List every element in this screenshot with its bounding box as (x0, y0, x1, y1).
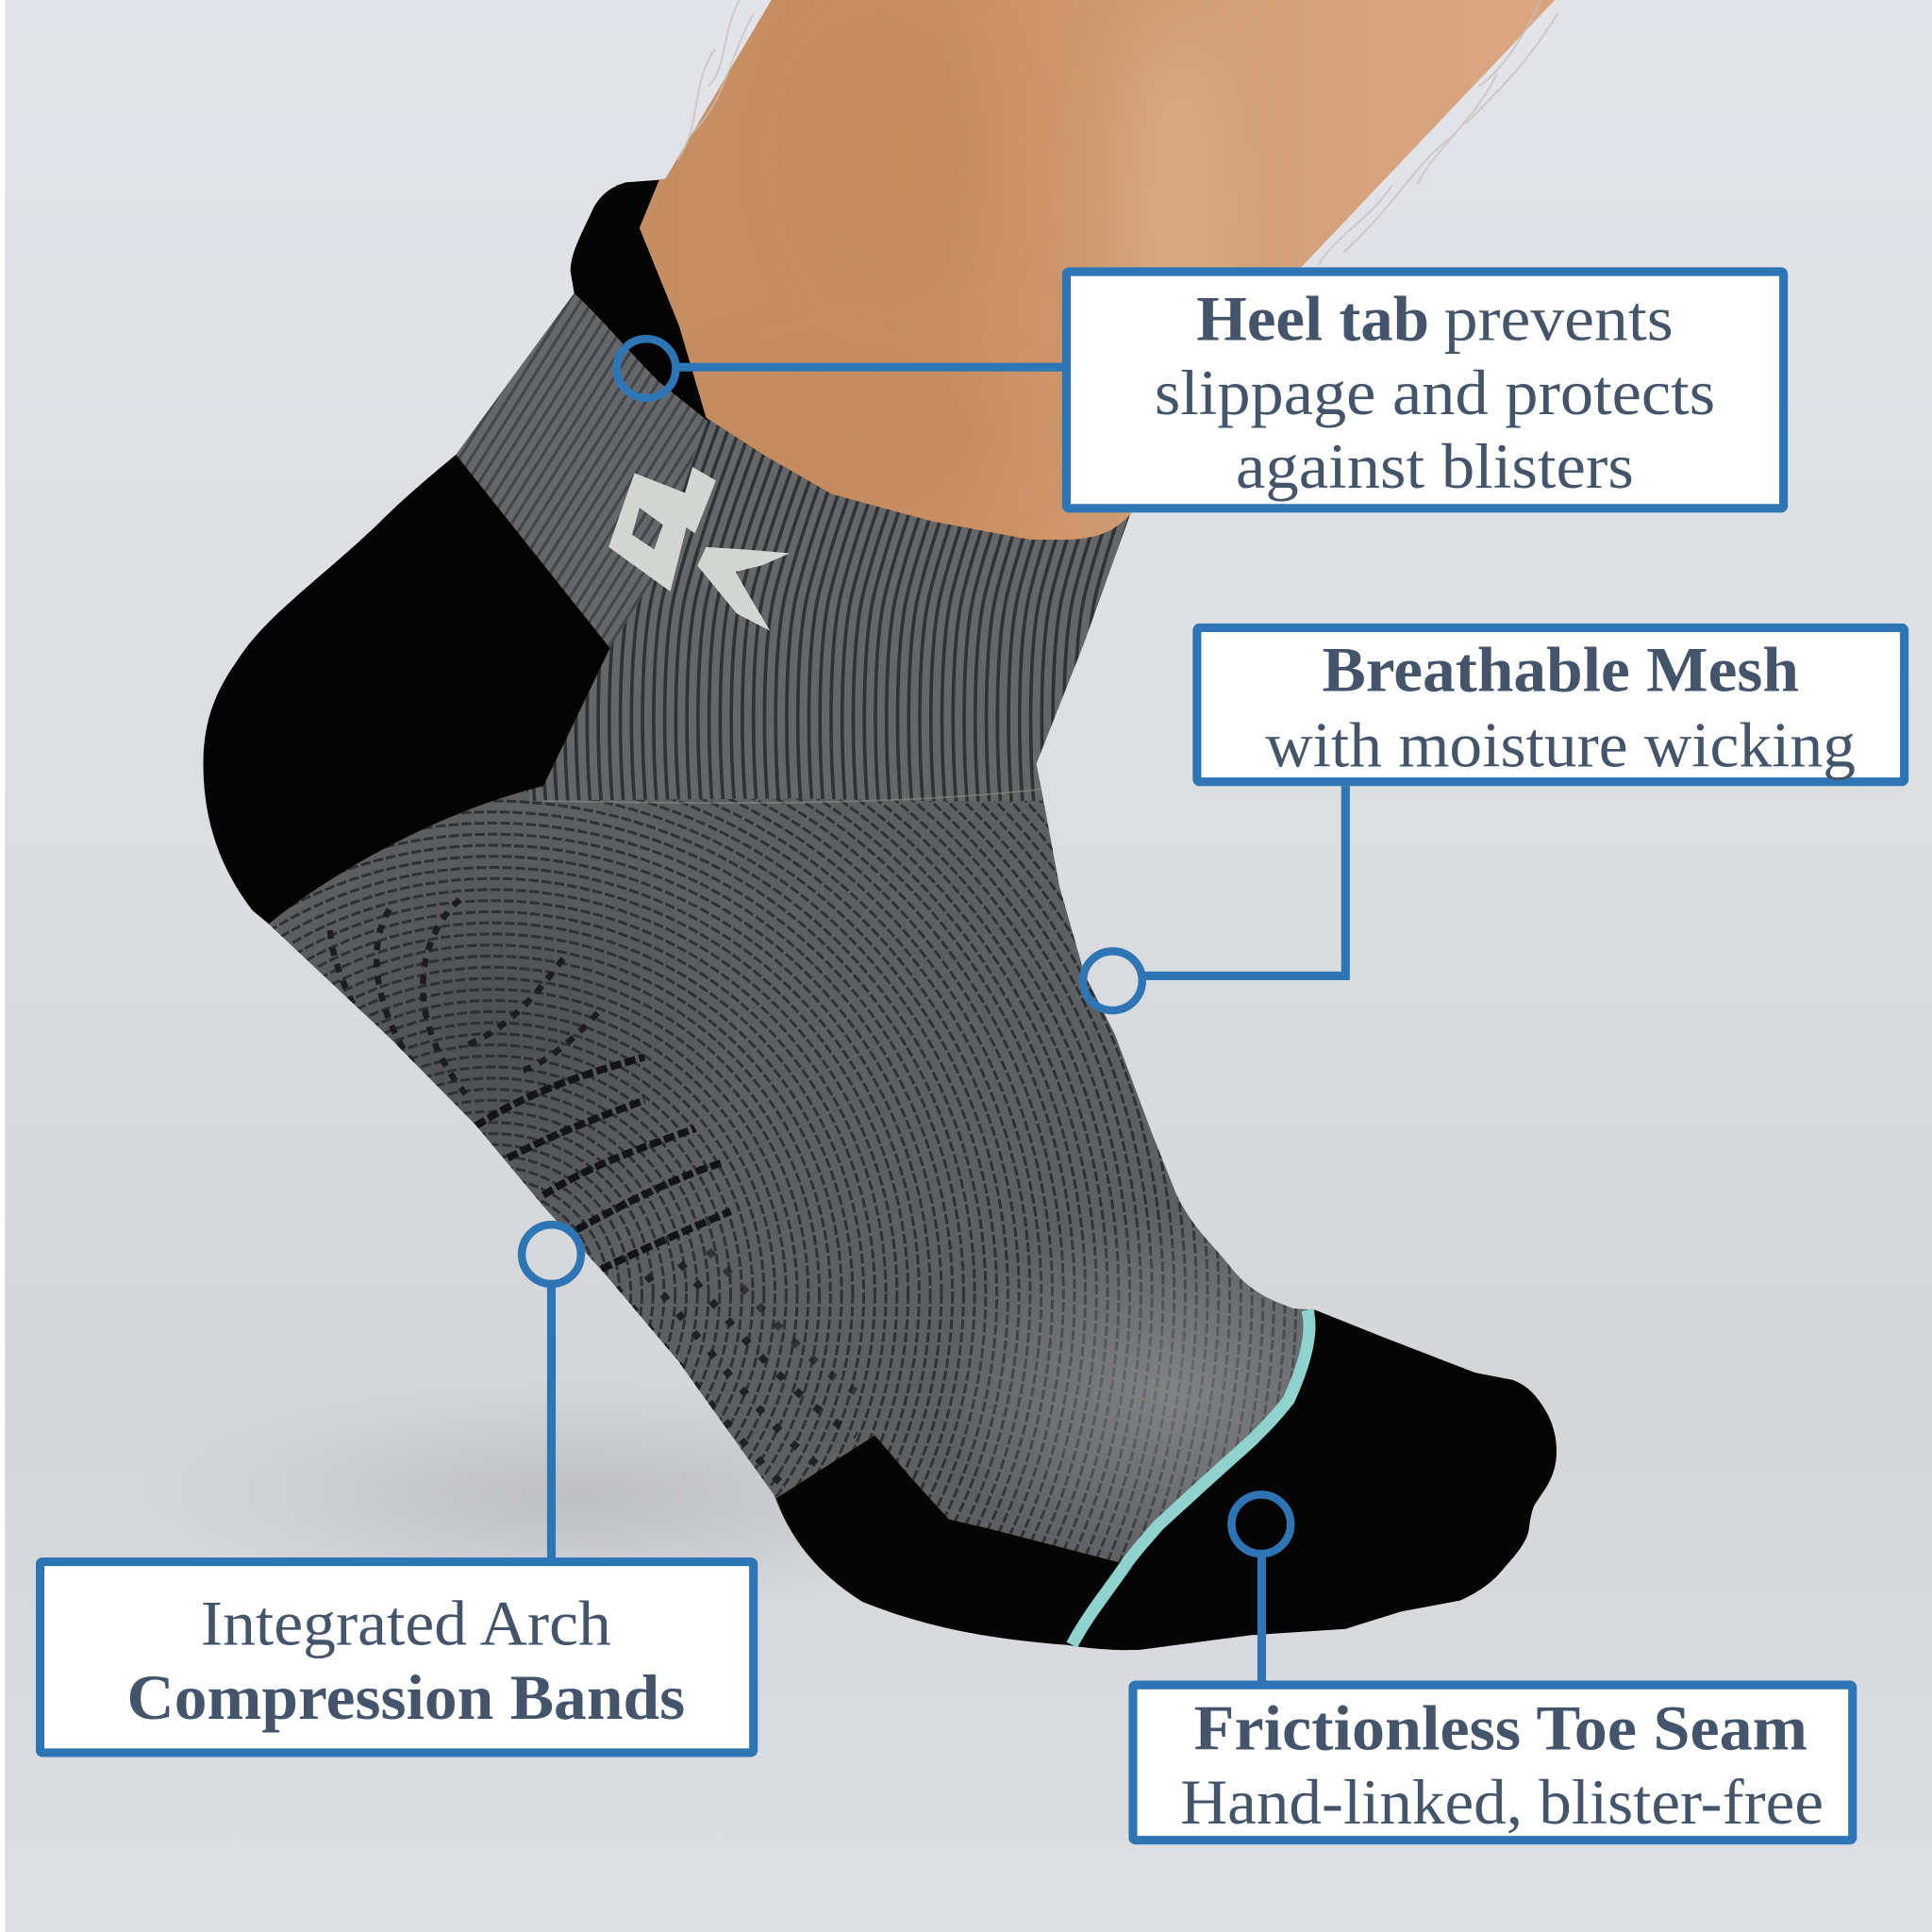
callout: heel tab: against blisters (1236, 430, 1634, 502)
callout: breathable mesh: with moisture wicking (1265, 708, 1856, 780)
callout: arch compression bands: Compression Bands (127, 1661, 685, 1733)
left cuff ribs (456, 293, 706, 648)
callout: heel tab (617, 272, 1784, 508)
black heel (204, 455, 610, 924)
callout: heel tab: Heel tab (1196, 282, 1429, 354)
floor shadow (136, 1380, 1023, 1614)
upper ribbed band and cuff (443, 246, 1195, 813)
knit seam line (542, 789, 1047, 803)
concentric knit lines (204, 457, 1341, 1651)
callout: arch compression bands (40, 1224, 754, 1753)
arch compression bands (475, 1058, 731, 1269)
callout: toe seam: Hand-linked, blister-free (1180, 1766, 1824, 1838)
leg skin (591, 0, 1577, 616)
callout: breathable mesh (1083, 627, 1905, 1010)
callout: arch compression bands: Integrated Arch (201, 1588, 611, 1659)
callout: toe seam (1133, 1494, 1853, 1840)
plantar dots (616, 1251, 869, 1485)
logo (608, 467, 790, 631)
callout: heel tab: prevents (1444, 282, 1674, 354)
black toe (776, 1309, 1557, 1650)
left white edge (0, 0, 5, 1932)
teal toe seam (1072, 1309, 1309, 1645)
callout: heel tab: slippage and protects (1155, 357, 1715, 428)
sock base knit (185, 160, 1577, 1675)
callout: toe seam: Frictionless Toe Seam (1194, 1692, 1807, 1764)
sock (204, 179, 1557, 1651)
heel tab (571, 180, 708, 422)
heel-side arcs (330, 899, 597, 1094)
toe area highlight (966, 1230, 1315, 1550)
callout: breathable mesh: Breathable Mesh (1322, 634, 1799, 706)
arch shading (246, 801, 740, 1269)
